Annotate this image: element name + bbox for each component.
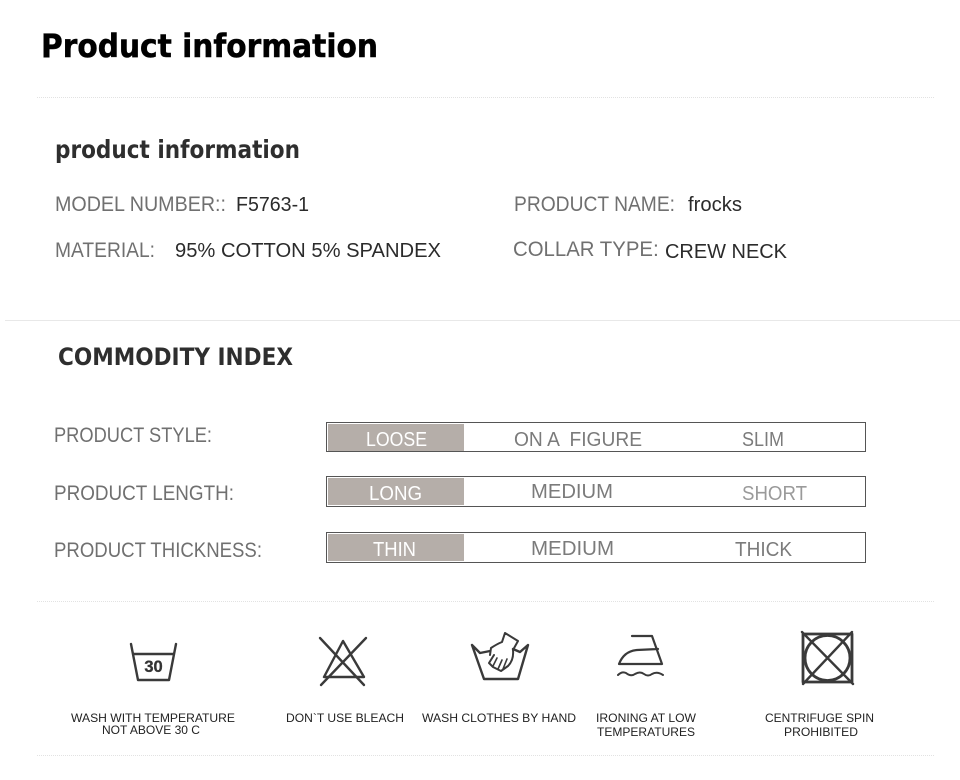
field: collar type: : bbox=[653, 238, 659, 261]
caption: wash temperature: WASH WITH TEMPERATURE bbox=[71, 711, 235, 725]
caption: wash temperature bbox=[71, 711, 235, 737]
row: product thickness: THIN bbox=[373, 539, 416, 561]
icon: no spin bbox=[802, 632, 853, 684]
row: product thickness bbox=[54, 532, 866, 562]
caption: no spin: PROHIBITED bbox=[784, 725, 858, 739]
row: product length: LONG bbox=[369, 483, 422, 505]
caption: no bleach: DON`T USE BLEACH bbox=[286, 711, 404, 725]
caption: wash temperature: NOT ABOVE 30 C bbox=[102, 723, 200, 737]
row: product style: SLIM bbox=[742, 429, 784, 451]
field: collar type: CREW NECK bbox=[665, 241, 788, 263]
caption: low iron: IRONING AT LOW bbox=[596, 711, 697, 725]
caption: no spin: CENTRIFUGE SPIN bbox=[765, 711, 874, 725]
field: collar type: COLLAR TYPE bbox=[513, 238, 653, 261]
icon: hand wash bbox=[472, 633, 528, 679]
icon: low iron bbox=[618, 636, 663, 676]
field: material bbox=[55, 239, 441, 262]
caption: hand wash: WASH CLOTHES BY HAND bbox=[422, 711, 576, 725]
row: product style: LOOSE bbox=[366, 429, 427, 451]
row: product length bbox=[54, 476, 866, 506]
row: product style bbox=[54, 422, 866, 452]
row: product length: PRODUCT LENGTH: bbox=[54, 482, 234, 505]
row: product length: MEDIUM bbox=[531, 481, 613, 503]
field: model number: MODEL NUMBER:: bbox=[55, 193, 226, 216]
caption: no spin bbox=[765, 711, 874, 739]
row: product thickness: THICK bbox=[735, 539, 793, 561]
caption: low iron bbox=[596, 711, 697, 739]
row: product length: SHORT bbox=[742, 483, 807, 505]
field: product name: PRODUCT NAME: bbox=[514, 193, 675, 216]
row: product style: PRODUCT STYLE: bbox=[54, 424, 212, 447]
row: product thickness: MEDIUM bbox=[531, 538, 614, 560]
field: material: MATERIAL: bbox=[55, 239, 155, 262]
panel: commodity index bbox=[54, 343, 866, 562]
panel: care instructions bbox=[71, 632, 874, 739]
caption: low iron: TEMPERATURES bbox=[597, 725, 695, 739]
section heading: product information: product information bbox=[55, 135, 300, 164]
field: material: 95% COTTON 5% SPANDEX bbox=[175, 240, 441, 262]
icon: wash at 30: 30 bbox=[144, 658, 163, 676]
title: Product information bbox=[41, 27, 378, 65]
field: product name: frocks bbox=[688, 194, 742, 216]
icon: no bleach bbox=[320, 638, 366, 685]
field: model number: F5763-1 bbox=[236, 194, 309, 216]
row: product thickness: PRODUCT THICKNESS: bbox=[54, 539, 262, 562]
panel: product information bbox=[55, 135, 788, 263]
icon: wash at 30 bbox=[131, 644, 176, 680]
section heading: commodity index: COMMODITY INDEX bbox=[58, 343, 293, 371]
field: collar type bbox=[513, 238, 788, 263]
row: product style: ON A FIGURE bbox=[514, 429, 642, 451]
